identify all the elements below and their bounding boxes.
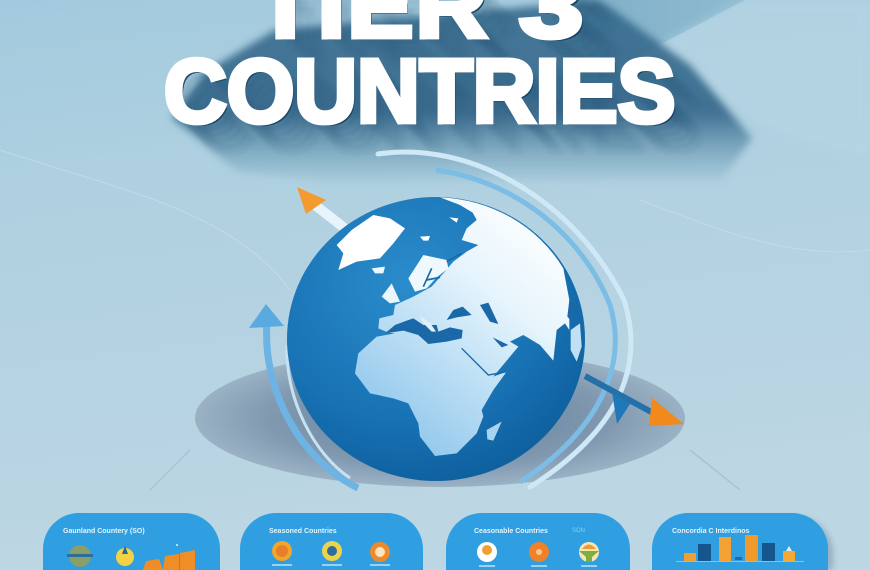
globe xyxy=(287,197,585,481)
Baltic xyxy=(423,253,462,287)
Scandinavia xyxy=(408,255,448,292)
Madagascar xyxy=(487,422,502,441)
arrow: orange upper left xyxy=(297,187,352,234)
title long shadow xyxy=(172,0,752,182)
card 4 drop shadow xyxy=(657,517,833,570)
ocean xyxy=(287,197,585,481)
arc: outer sweep xyxy=(378,152,631,487)
card 1 icons xyxy=(67,544,195,570)
arc: inner sweep xyxy=(436,170,615,482)
globe illustration xyxy=(195,150,685,491)
Arctic islands xyxy=(420,217,458,241)
Britain xyxy=(382,283,400,303)
arrow: orange lower right head xyxy=(649,398,684,426)
arrow: dark blue lower right xyxy=(585,376,655,424)
Greenland xyxy=(337,215,405,270)
sea: Persian Gulf xyxy=(493,337,508,347)
panel: card 4 xyxy=(652,513,828,570)
sea: Black Sea xyxy=(447,307,472,320)
title xyxy=(164,0,697,150)
card 2 heading: Seasoned Countries xyxy=(269,528,337,535)
Iceland xyxy=(372,267,385,273)
shadow disc xyxy=(195,349,685,487)
sea: Red Sea xyxy=(462,348,507,375)
panel: card 2 xyxy=(240,513,423,570)
arrow: light blue left xyxy=(249,304,358,488)
card 3 heading: Ceasonable Countries xyxy=(474,528,548,535)
card 4 bar chart xyxy=(676,535,804,562)
sea: Mediterranean xyxy=(385,318,463,344)
continents: Eurasia and Africa xyxy=(355,197,569,456)
sea: east Asia xyxy=(567,300,570,319)
Southeast Asia xyxy=(571,323,582,362)
panel: card 3 xyxy=(446,513,630,570)
card 4 heading: Concordia C Interdinos xyxy=(672,528,749,535)
Italy xyxy=(420,316,436,332)
card 2 icons xyxy=(272,541,390,566)
card 3 icons xyxy=(477,542,599,567)
title line: COUNTRIES: COUNTRIES xyxy=(164,42,675,142)
sea: Caspian xyxy=(480,303,498,324)
card 1 heading: Gaunland Countery (SO) xyxy=(63,528,145,535)
card 3 tag: SON xyxy=(572,528,585,534)
panel: card 1 xyxy=(43,513,220,570)
